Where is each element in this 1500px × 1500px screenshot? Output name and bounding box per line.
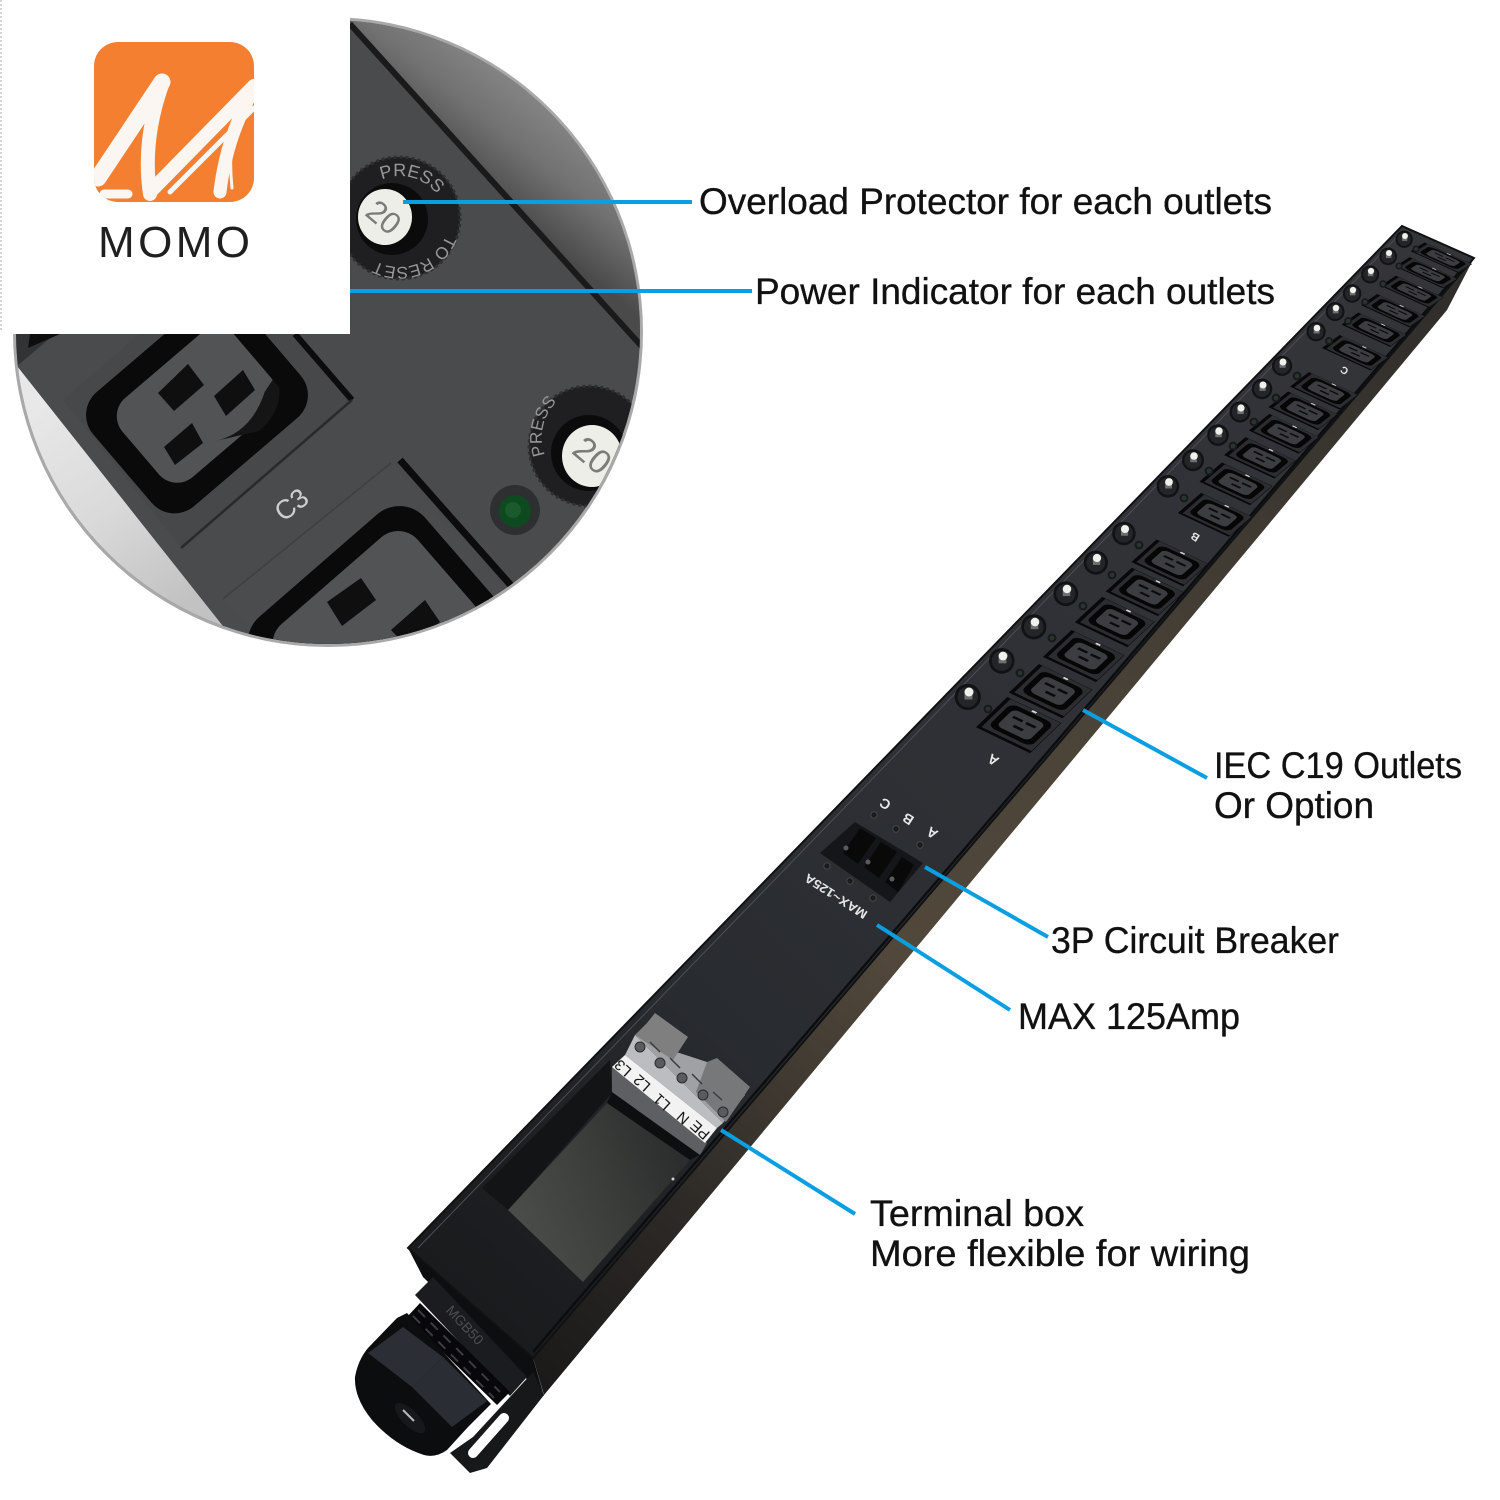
- rating label: MAX~125A: [802, 871, 870, 921]
- cable gland: [355, 1277, 527, 1456]
- callout: max amperage: MAX 125Amp: [1018, 996, 1240, 1037]
- terminal block: N: [674, 1108, 693, 1128]
- callout: outlets: IEC C19 Outlets: [1214, 745, 1462, 786]
- terminal block: L3: [611, 1056, 635, 1080]
- outlets group A: [976, 540, 1208, 753]
- gland lock nut: [415, 1277, 527, 1396]
- outlets group B: [1178, 372, 1358, 537]
- leader lines: [350, 202, 1207, 1214]
- 3P circuit breaker: [820, 795, 941, 902]
- terminal block: L2: [630, 1071, 654, 1095]
- outlets group C: [1322, 243, 1472, 371]
- logo icon: orange M: [94, 42, 254, 202]
- group letters on the bar: C: [1339, 363, 1351, 376]
- callout: overload protector: Overload Protector for each outlets: [699, 181, 1272, 222]
- overload protector button: 20: [359, 193, 408, 242]
- group letters on the bar: B: [1189, 529, 1202, 543]
- 3P circuit breaker: B: [899, 810, 917, 828]
- gland cap: [355, 1313, 491, 1456]
- terminal box opening: [482, 1060, 700, 1282]
- callout: terminal box: More flexible for wiring: [870, 1233, 1250, 1274]
- callout: outlets: Or Option: [1214, 785, 1374, 826]
- bar side face: [533, 258, 1474, 1395]
- callout: terminal box: [870, 1193, 1250, 1274]
- bar end face: [408, 1248, 544, 1396]
- terminal block: [611, 1013, 750, 1155]
- overload protector button, second: 20: [565, 429, 619, 483]
- power indicators row: [984, 245, 1420, 713]
- overload protector button, second: [528, 384, 632, 508]
- callout: outlets: [1214, 745, 1462, 826]
- gland lock nut: MGB50: [443, 1302, 487, 1348]
- socket below C3: [223, 458, 514, 644]
- panel: zoomed detail circle: [13, 18, 643, 647]
- terminal block: PE: [687, 1117, 713, 1143]
- callout: circuit breaker: 3P Circuit Breaker: [1051, 920, 1339, 961]
- group letters on the bar: A: [984, 751, 1002, 769]
- overload buttons row: [955, 231, 1413, 710]
- bracket mounting slot: [473, 1418, 504, 1453]
- group letters on the bar: [984, 363, 1351, 769]
- product: vertical PDU bar: [355, 226, 1474, 1473]
- socket C3: [86, 334, 354, 549]
- mounting bracket: [450, 1372, 544, 1473]
- gland thread: [407, 1303, 510, 1405]
- logo wordmark: MOMO: [98, 218, 250, 267]
- terminal block: L1: [650, 1090, 674, 1114]
- 3P circuit breaker: C: [876, 795, 894, 813]
- label: C3: C3: [269, 482, 314, 527]
- overload protector button: [350, 156, 462, 280]
- bar top face: [408, 226, 1474, 1358]
- callout: power indicator: Power Indicator for each outlets: [755, 271, 1275, 312]
- overload protector button: TO RESET: [372, 239, 456, 279]
- callout: terminal box: Terminal box: [870, 1193, 1084, 1234]
- logo block: [0, 0, 350, 334]
- overload protector button: PRESS: [380, 164, 444, 192]
- 3P circuit breaker: A: [923, 824, 941, 842]
- power indicator LED: [490, 485, 540, 535]
- overload protector button, second: PRESS: [530, 396, 555, 457]
